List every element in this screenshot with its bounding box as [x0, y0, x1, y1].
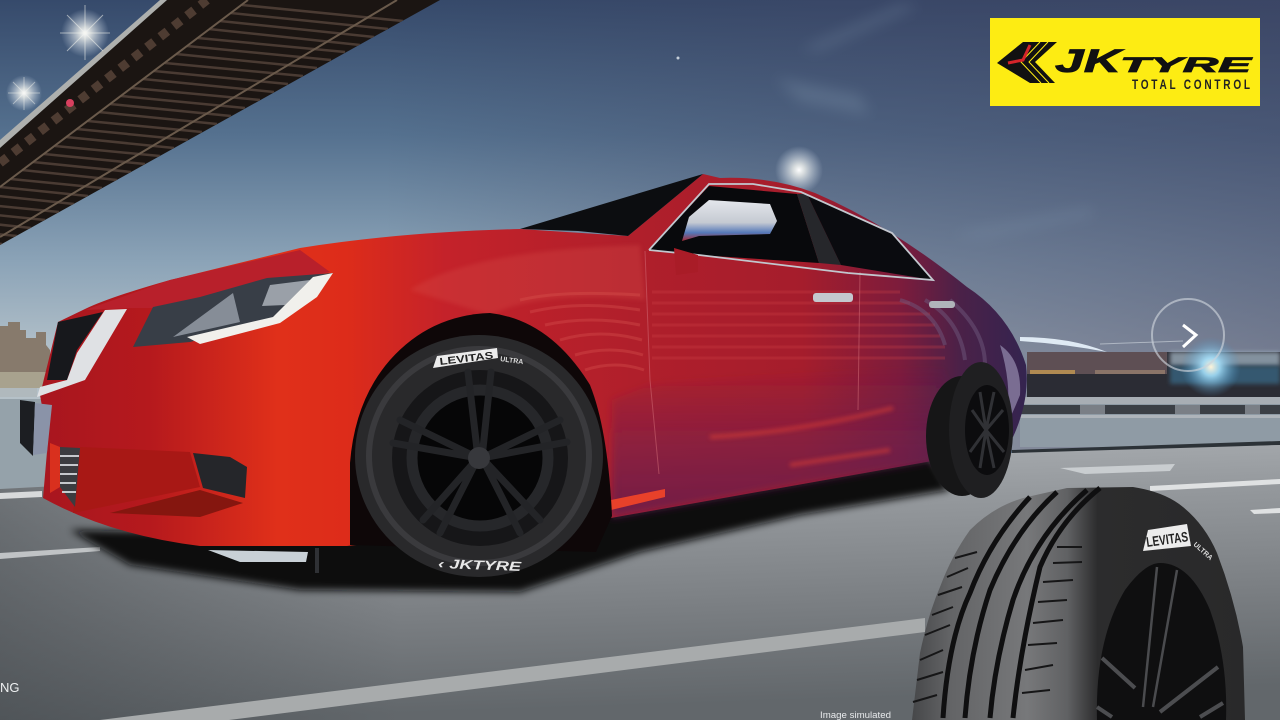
partial caption: NG: [0, 680, 20, 695]
tyre brand: Levitas: ULTRA: [500, 356, 524, 366]
window chrome trim: [649, 184, 933, 280]
red car: [20, 174, 1027, 577]
b pillar: [797, 194, 841, 265]
tyre brand: Levitas: [433, 348, 524, 368]
simulated image note: Image simulated: [820, 710, 891, 720]
headlight: [133, 273, 333, 347]
rear quarter reflections: [1000, 345, 1020, 430]
tyre silhouette: [912, 487, 1245, 720]
fender reflections: [410, 245, 645, 315]
rim: [1097, 563, 1226, 720]
tyre logo: ULTRA: [1192, 541, 1214, 562]
large tyre close-up: [912, 487, 1245, 720]
road: [0, 445, 1280, 720]
carousel next arrow: [1152, 299, 1224, 371]
tyre logo: [1143, 524, 1214, 562]
mirror stalk: [674, 248, 698, 275]
JK Tyre logo: [990, 18, 1260, 106]
front wheel: [355, 335, 603, 577]
logo chevron mark: [997, 42, 1057, 83]
logo tagline: TOTAL CONTROL: [1132, 76, 1251, 92]
grille: [47, 312, 103, 380]
logo wordmark: JK: [1055, 43, 1126, 79]
door lines: [645, 251, 860, 474]
stadium lights: [6, 5, 823, 194]
tyre logo: LEVITAS: [1145, 528, 1189, 550]
hood: [85, 250, 330, 310]
bumper crease and intake: [73, 447, 200, 513]
road lane marking: [100, 618, 925, 720]
car body: [40, 174, 1027, 546]
windshield: [520, 174, 703, 236]
rear window: [807, 194, 933, 280]
fog lamp: [193, 453, 247, 498]
car shadow: [70, 455, 950, 592]
logo wordmark: TYRE: [1120, 54, 1253, 77]
guard rail and barrier: [0, 388, 1280, 489]
door handles: [813, 293, 853, 302]
front wheel arch: [350, 313, 612, 552]
lower grille: [50, 443, 80, 507]
chrome strip: [37, 309, 127, 397]
chrome mirror: [682, 200, 777, 241]
distant city skyline: [0, 322, 1280, 397]
tread grooves: [943, 488, 1100, 718]
license plate: [20, 400, 52, 456]
tread sipes: [913, 547, 1082, 702]
lower door red streaks: [710, 408, 893, 465]
tyre brand: Levitas: LEVITAS: [439, 350, 494, 368]
logo wordmark: [1055, 43, 1253, 79]
sky background: [0, 0, 1280, 450]
rear wheel: [926, 362, 1013, 498]
lower door purple band: [611, 365, 950, 518]
door stripes: [652, 292, 945, 358]
side skirt chrome: [208, 550, 308, 562]
bridge: [0, 0, 440, 245]
tyre brand: JK Tyre: ‹ JKTYRE: [438, 556, 522, 574]
door window: [649, 186, 819, 263]
